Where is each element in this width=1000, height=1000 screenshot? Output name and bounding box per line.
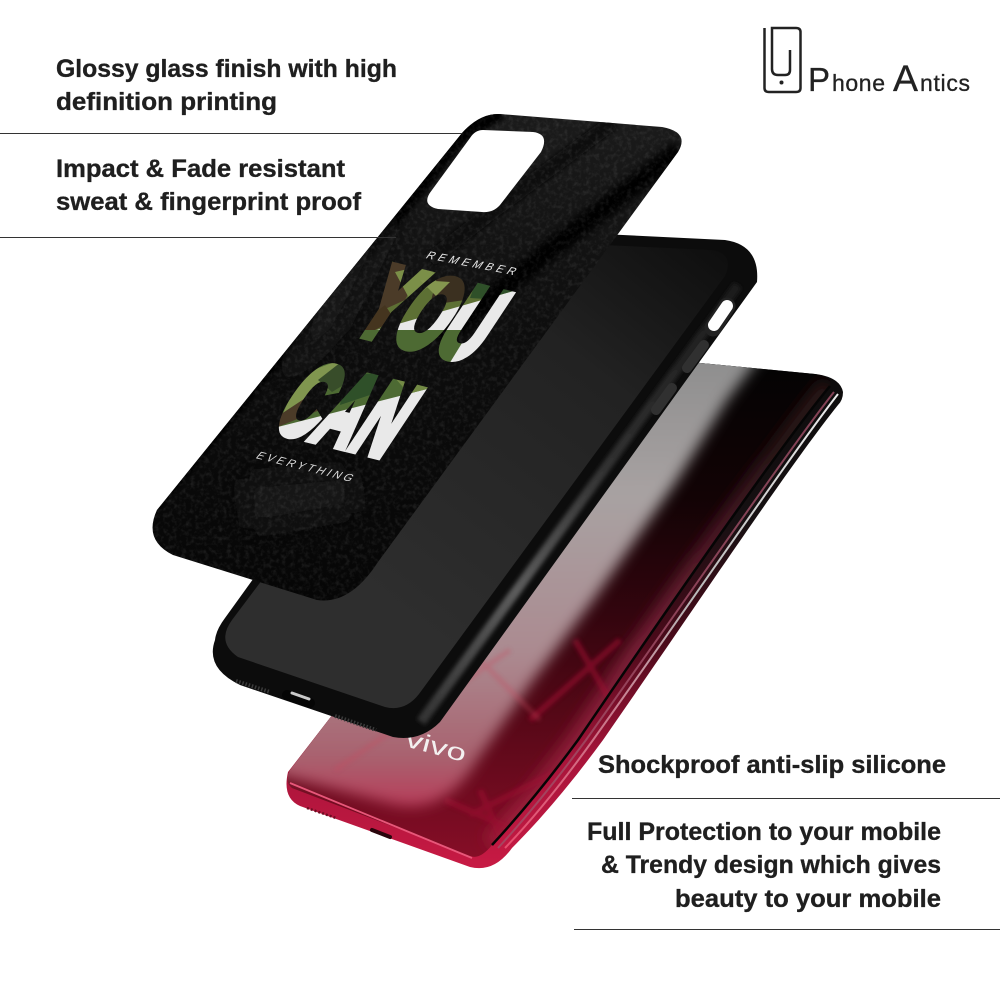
- bottom rim highlight: [290, 783, 472, 858]
- divider line bottom: [574, 929, 1000, 930]
- text block: full protection: beauty to your mobile: [675, 885, 941, 913]
- logo wordmark: hone: [832, 70, 885, 96]
- case outer: [213, 232, 757, 738]
- screen: [225, 243, 728, 708]
- camera cutout: [713, 306, 727, 328]
- text block: full protection: Full Protection to your mobile: [587, 818, 941, 846]
- red phone: [260, 340, 843, 868]
- text block: glossy finish: definition printing: [56, 88, 277, 116]
- text block: glossy finish: Glossy glass finish with high: [56, 55, 397, 83]
- divider line second: [0, 237, 396, 238]
- red phone back panel: [287, 362, 831, 857]
- divider line third: [572, 798, 1000, 799]
- artwork: REMEMBER: REMEMBER: [423, 250, 519, 278]
- text block: full protection: & Trendy design which gives: [601, 851, 941, 879]
- vivo logo: vivo: [402, 726, 469, 768]
- text block: impact resistant: Impact & Fade resistant: [56, 155, 346, 183]
- side buttons: [656, 345, 704, 410]
- logo phone icon: [764, 28, 800, 92]
- camera hole: [427, 130, 544, 212]
- grip ridges: [236, 681, 376, 730]
- back panel pattern and reflection: [260, 340, 830, 850]
- text block: shockproof: Shockproof anti-slip silicone: [598, 751, 946, 779]
- red phone body rim: [286, 362, 843, 868]
- artwork: CAN: CAN: [256, 343, 440, 478]
- glass texture: [140, 110, 690, 610]
- text block: glossy finish: [56, 55, 397, 116]
- logo: Phone Antics: [764, 28, 970, 99]
- glass back panel: [140, 110, 690, 610]
- divider line top: [0, 133, 462, 134]
- charging port: [287, 693, 310, 703]
- black case phone: [213, 232, 757, 738]
- logo wordmark: A: [893, 58, 918, 99]
- glass base: [153, 114, 682, 601]
- side rim stripes: [492, 386, 838, 848]
- logo wordmark: P: [808, 61, 830, 98]
- artwork: EVERYTHING: EVERYTHING: [253, 451, 356, 484]
- speaker and port: [307, 808, 390, 837]
- text block: impact resistant: sweat & fingerprint proof: [56, 188, 362, 216]
- case side band: [421, 285, 738, 722]
- text block: full protection: [587, 818, 941, 913]
- artwork: YOU: YOU: [335, 246, 528, 383]
- text block: impact resistant: [56, 155, 362, 216]
- logo wordmark: ntics: [920, 70, 970, 96]
